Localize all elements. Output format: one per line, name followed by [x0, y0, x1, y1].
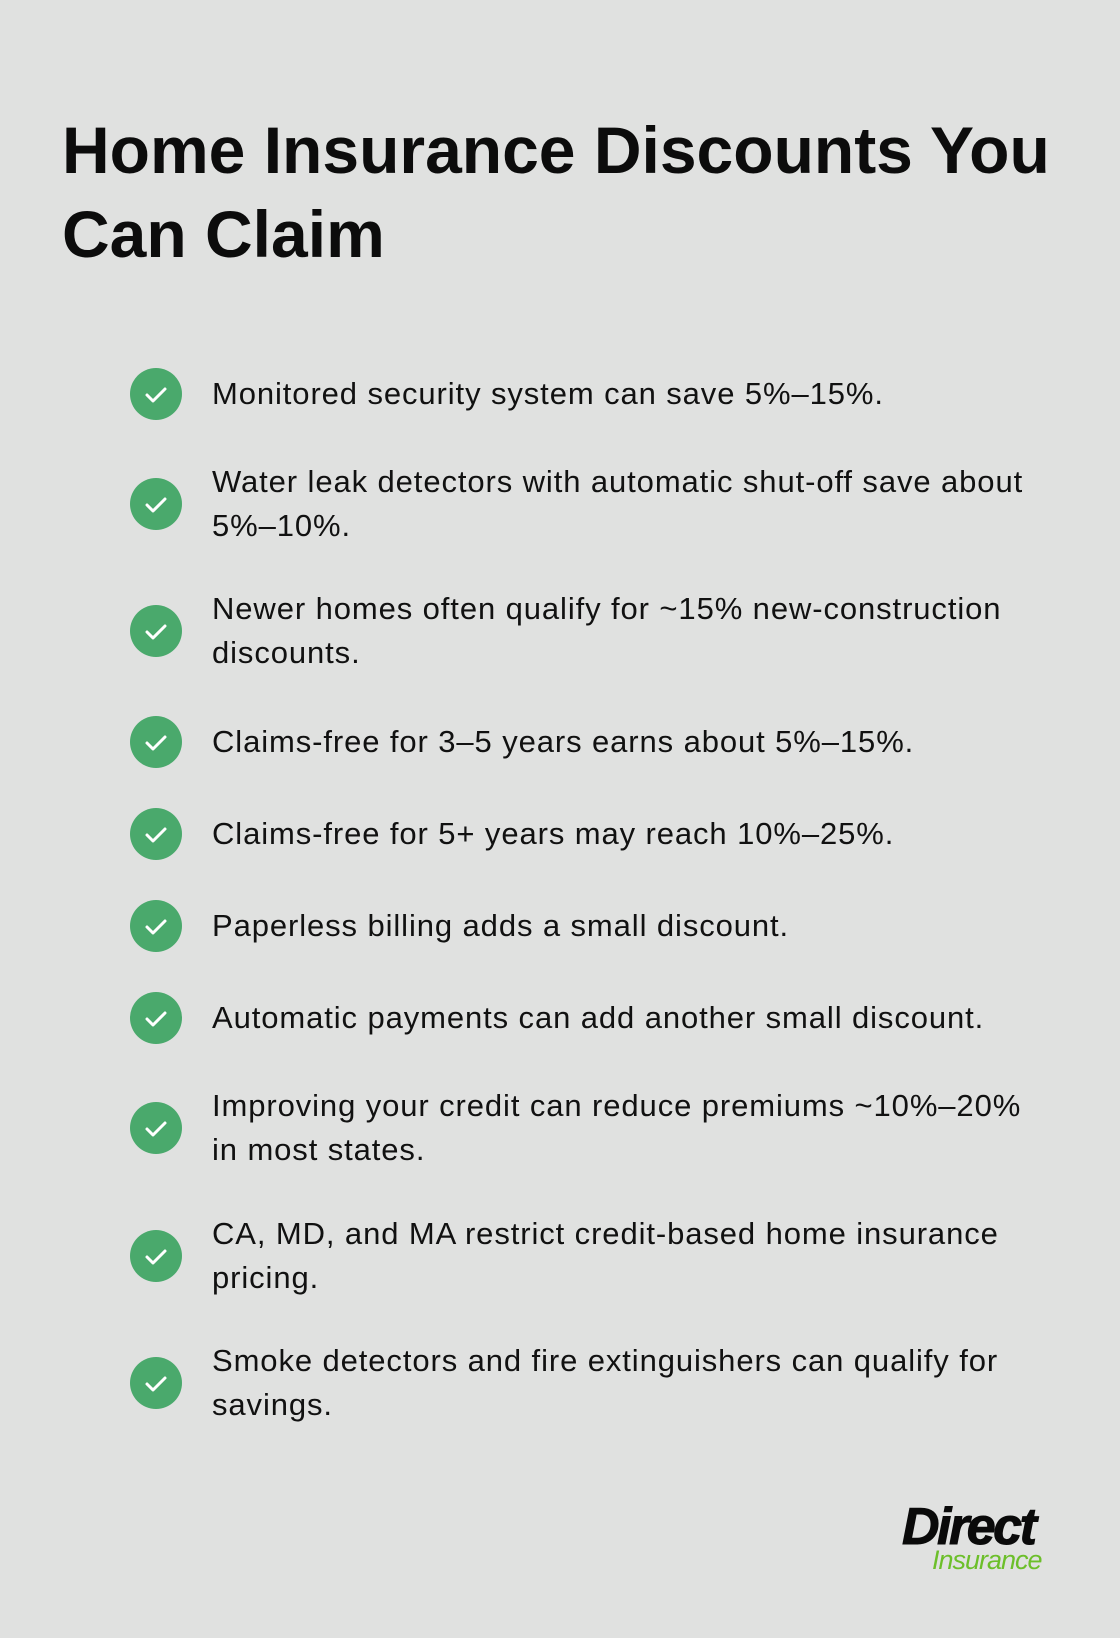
item 8: Improving your credit can reduce premiums ~10%–20% [212, 1088, 1021, 1123]
item 4: Claims-free for 3–5 years earns about 5%–15%. [212, 724, 914, 759]
item 2: Water leak detectors with automatic shut-off save about [212, 464, 1023, 499]
item 9: CA, MD, and MA restrict credit-based home insurance [212, 1216, 999, 1251]
item 8 [130, 1088, 1021, 1167]
logo: Direct [902, 1498, 1034, 1556]
item 5: Claims-free for 5+ years may reach 10%–25%. [212, 816, 894, 851]
item 7: Automatic payments can add another small discount. [212, 1000, 984, 1035]
item 8: in most states. [212, 1132, 425, 1167]
item 3: discounts. [212, 635, 361, 670]
item 2 [130, 464, 1023, 543]
item 3 [130, 591, 1001, 670]
item 1: Monitored security system can save 5%–15%. [212, 376, 884, 411]
title: Home Insurance Discounts You Can Claim [62, 113, 1050, 271]
item 3: Newer homes often qualify for ~15% new-construction [212, 591, 1001, 626]
item 1 [130, 368, 884, 420]
item 2: 5%–10%. [212, 508, 351, 543]
item 5 [130, 808, 894, 860]
item 10: savings. [212, 1387, 333, 1422]
item 6: Paperless billing adds a small discount. [212, 908, 789, 943]
item 4 [130, 716, 914, 768]
item 10 [130, 1343, 998, 1422]
item 6 [130, 900, 789, 952]
item 7 [130, 992, 984, 1044]
item 9: pricing. [212, 1260, 319, 1295]
item 9 [130, 1216, 999, 1295]
logo: Insurance [932, 1545, 1042, 1575]
item 10: Smoke detectors and fire extinguishers can qualify for [212, 1343, 998, 1378]
